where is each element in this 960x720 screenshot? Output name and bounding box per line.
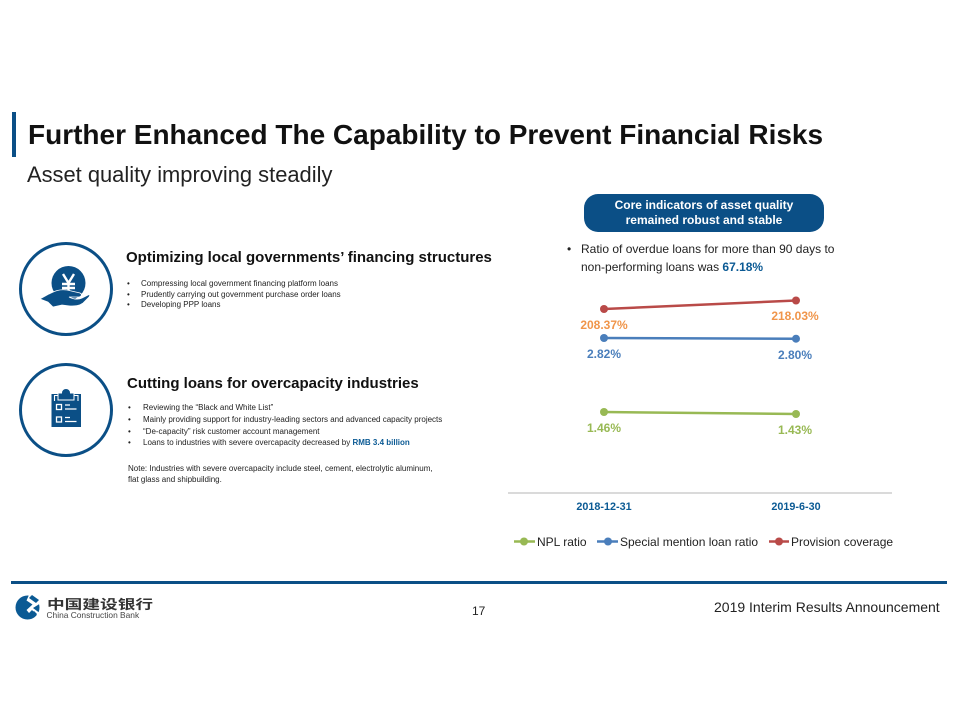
- series: special mention loan ratio: 2.82%: [587, 347, 621, 361]
- bullet list: local governments: [127, 279, 341, 309]
- series: provision coverage: 218.03%: [771, 309, 819, 323]
- icon: yuan coin in hand: [19, 242, 113, 336]
- note: Note: Industries with severe overcapacity include steel, cement, electrolytic aluminum,: [128, 464, 433, 472]
- callout: core indicators: [584, 194, 824, 232]
- overdue loans text: [567, 242, 834, 274]
- bullet list: overcapacity: •: [128, 438, 131, 447]
- bullet list: overcapacity: Mainly providing support for industry-leading sectors and advanced capacity projects: [143, 415, 442, 424]
- callout: core indicators: remained robust and stable: [626, 213, 782, 227]
- legend: [514, 535, 893, 549]
- bullet list: overcapacity: •: [128, 415, 131, 424]
- footer label: 2019 Interim Results Announcement: [714, 599, 940, 615]
- heading: local governments: Optimizing local governments’ financing structures: [126, 249, 492, 266]
- title: Further Enhanced The Capability to Prevent Financial Risks: [28, 119, 823, 150]
- bullet list: overcapacity: Loans to industries with severe overcapacity decreased by RMB 3.4 billion: [143, 438, 410, 447]
- footer rule: [11, 581, 947, 584]
- overdue loans text: Ratio of overdue loans for more than 90 days to: [581, 242, 834, 256]
- logo English name: China Construction Bank: [46, 610, 139, 620]
- legend: Provision coverage: [791, 535, 893, 549]
- logo Chinese name: 中国建设银行: [47, 597, 153, 612]
- legend: NPL ratio: [537, 535, 587, 549]
- note: flat glass and shipbuilding.: [128, 475, 222, 484]
- bullet list: local governments: Prudently carrying out government purchase order loans: [141, 290, 341, 299]
- bullet list: local governments: •: [127, 300, 130, 309]
- overdue loans text: •: [567, 242, 571, 256]
- callout: core indicators: Core indicators of asset quality: [615, 198, 793, 212]
- heading: overcapacity: Cutting loans for overcapacity industries: [127, 375, 419, 392]
- series: special mention loan ratio: [587, 334, 812, 362]
- subtitle: Asset quality improving steadily: [27, 162, 332, 187]
- legend: Special mention loan ratio: [620, 535, 758, 549]
- bullet list: overcapacity: Reviewing the “Black and White List”: [143, 403, 273, 412]
- bullet list: overcapacity: •: [128, 427, 131, 436]
- line chart: [508, 296, 893, 549]
- title accent bar: [12, 112, 16, 157]
- series: provision coverage: 208.37%: [580, 318, 628, 332]
- bullet list: overcapacity: [128, 403, 442, 447]
- x axis labels: [576, 501, 821, 513]
- series: special mention loan ratio: 2.80%: [778, 348, 812, 362]
- overdue loans text: non-performing loans was 67.18%: [581, 260, 763, 274]
- bullet list: overcapacity: •: [128, 403, 131, 412]
- series: NPL ratio: 1.43%: [778, 423, 812, 437]
- bullet list: overcapacity: “De-capacity” risk customer account management: [143, 427, 320, 436]
- icon: clipboard checklist: [19, 363, 113, 457]
- x axis labels: 2019-6-30: [771, 501, 821, 513]
- series: NPL ratio: [587, 408, 812, 437]
- bullet list: local governments: •: [127, 290, 130, 299]
- page number: 17: [472, 604, 485, 618]
- bullet list: local governments: Developing PPP loans: [141, 300, 220, 309]
- series: provision coverage: [580, 296, 819, 332]
- bullet list: local governments: •: [127, 279, 130, 288]
- note: [128, 464, 433, 484]
- axis line: [508, 492, 892, 494]
- logo: China Construction Bank: [16, 595, 153, 620]
- series: NPL ratio: 1.46%: [587, 421, 621, 435]
- bullet list: local governments: Compressing local government financing platform loans: [141, 279, 338, 288]
- x axis labels: 2018-12-31: [576, 501, 632, 513]
- logo mark: [16, 595, 40, 620]
